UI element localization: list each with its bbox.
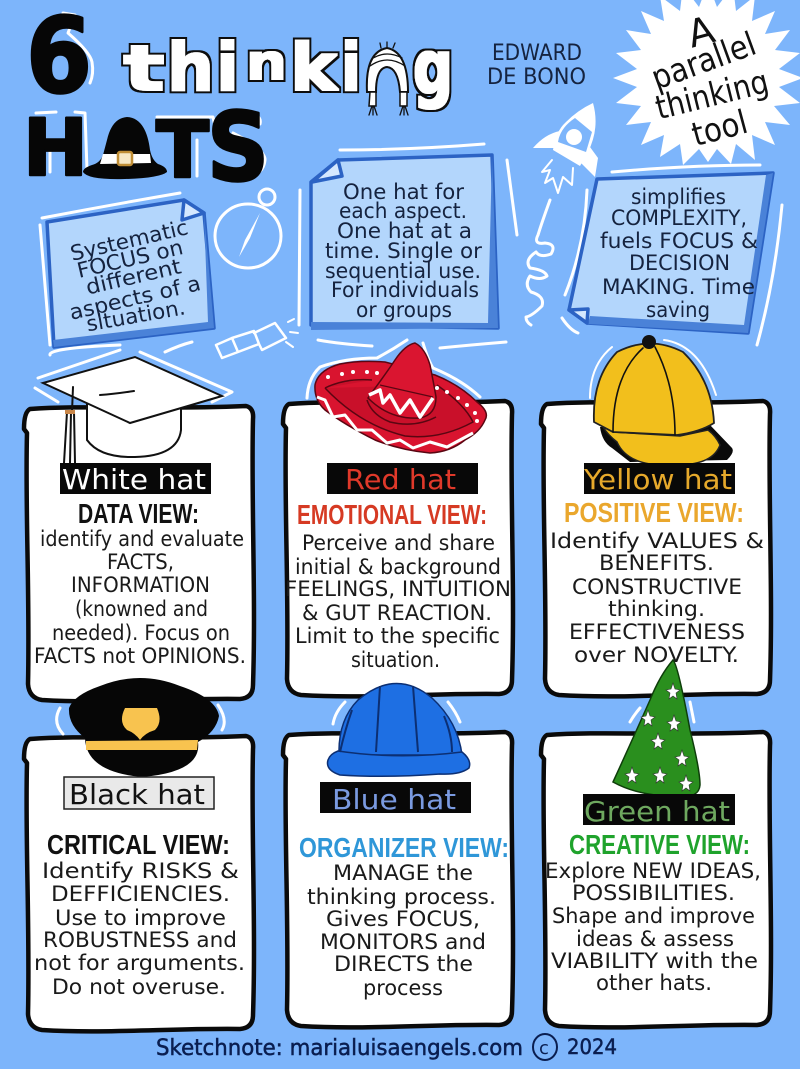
note: one hat for each aspect: or groups [356,298,452,322]
description text: EFFECTIVENESS [569,620,745,644]
footer credit: Sketchnote: marialuisaengels.com [156,1036,523,1061]
word: thinking: g [413,25,453,111]
note: simplifies complexity [569,173,773,333]
description text: Gives FOCUS, [326,907,480,931]
footer credit: c [539,1038,549,1059]
description text: identify and evaluate [40,527,244,551]
hat label: Yellow hat [583,463,732,496]
description text: CONSTRUCTIVE [572,575,742,599]
starburst callout: a parallel thinking tool: tool [687,102,752,154]
description text: initial & background [295,555,501,579]
note: systematic focus: different [84,254,183,299]
note: one hat for each aspect: sequential use. [325,259,481,283]
description text: VIABILITY with the [551,949,758,973]
note: one hat for each aspect [311,155,498,330]
author name: DE BONO [487,65,586,90]
description text: DEFFICIENCIES. [51,882,230,906]
description text [550,529,764,667]
starburst callout: a parallel thinking tool: A [683,7,719,57]
note: simplifies complexity: saving [646,298,710,322]
panel: white hat [24,350,254,701]
description text: Limit to the specific [295,624,500,648]
description text: BENEFITS. [599,551,714,575]
note: one hat for each aspect: For individuals [331,278,479,302]
word: thinking [123,25,453,115]
word: hats [23,93,269,203]
description text: process [363,976,443,1000]
word: thinking: i [341,29,361,106]
note: simplifies complexity: MAKING. Time [602,275,755,299]
starburst callout: a parallel thinking tool [613,0,800,165]
panel: blue hat [283,683,513,1027]
icon: green wizard hat [613,660,700,796]
description text: situation. [351,648,440,672]
description text: Explore NEW IDEAS, [545,859,761,883]
heading: critical view: CRITICAL VIEW: [47,829,230,860]
description text: Shape and improve [552,904,755,928]
description text: & GUT REACTION. [302,601,492,625]
description text: (knowned and [75,597,208,621]
panel: black hat [24,678,254,1031]
description text: Do not overuse. [52,975,226,999]
description text: ROBUSTNESS and [43,928,237,952]
footer credit: 2024 [567,1035,617,1059]
description text: FEELINGS, INTUITION [285,577,511,601]
note: systematic focus: situation. [84,295,187,336]
description text: over NOVELTY. [574,643,739,667]
icon: blue hard hat [328,683,470,776]
note: systematic focus: Systematic [68,215,190,266]
description text: Identify RISKS & [42,859,239,883]
heading: emotional view: EMOTIONAL VIEW: [297,499,487,530]
description text: ideas & assess [576,927,734,951]
note: systematic focus: aspects of a [67,271,203,325]
description text: FACTS not OPINIONS. [34,644,246,668]
description text: other hats. [596,971,712,995]
heading: data view: DATA VIEW: [78,498,199,529]
title: 6 thinking hats [23,0,453,203]
note: one hat for each aspect: time. Single or [325,239,482,263]
icon: graduation cap [43,357,222,463]
description text: MONITORS and [320,930,486,954]
description text [34,527,246,668]
heading: creative view: CREATIVE VIEW: [569,829,750,860]
word: thinking: n [246,35,287,91]
word: thinking: t [123,32,165,105]
word: thinking: h [167,29,214,106]
hat label: Green hat [584,795,730,828]
author name [487,41,586,90]
word: hats: T [156,106,209,196]
heading: positive view: POSITIVE VIEW: [564,497,744,528]
panel: yellow hat [541,335,771,696]
author name: EDWARD [492,41,582,66]
word: hats: H [23,104,88,194]
note: one hat for each aspect: One hat at a [337,219,472,243]
description text [545,859,761,995]
description text [285,531,511,672]
panel: green hat [541,660,771,1027]
description text: not for arguments. [34,951,245,975]
icon: compass doodle [215,189,281,268]
note: one hat for each aspect: each aspect. [339,199,467,223]
note: simplifies complexity: COMPLEXITY, [611,206,747,230]
description text: Perceive and share [302,531,495,555]
icon: red sombrero [315,343,486,453]
description text: thinking process. [307,885,496,909]
icon: pilgrim hat as letter A [83,117,167,179]
description text: MANAGE the [333,861,473,885]
heading: organizer view: ORGANIZER VIEW: [299,832,509,863]
note: simplifies complexity: simplifies [631,185,726,209]
starburst callout: a parallel thinking tool: thinking [651,62,772,127]
description text: Use to improve [55,906,226,930]
icon: knitted hat in place of letter [367,42,408,115]
hat label: Blue hat [332,783,456,816]
word: thinking: k [290,31,339,106]
hat label: Black hat [69,778,205,811]
starburst callout: a parallel thinking tool: parallel [646,24,761,97]
note: systematic focus [47,200,214,347]
icon: officer cap [69,678,219,777]
description text: thinking. [608,597,705,621]
description text: INFORMATION [71,573,210,597]
squiggle line [526,200,553,325]
note: systematic focus: FOCUS on [75,235,185,283]
panel: red hat [283,340,513,696]
word: hats: S [207,93,269,203]
description text [307,861,496,1000]
description text [34,859,245,999]
icon: yellow cap [594,335,733,465]
description text: DIRECTS the [334,952,473,976]
description text: POSSIBILITIES. [572,881,735,905]
description text: needed). Focus on [52,621,230,645]
note: simplifies complexity: DECISION [629,251,730,275]
description text: FACTS, [107,550,174,574]
decorative swooshes [40,144,782,355]
description text: Identify VALUES & [550,529,764,553]
icon: rocket doodle [533,103,598,193]
hat label: Red hat [345,463,456,496]
hat label: White hat [62,463,206,496]
icon: flashlight doodle [216,319,298,358]
note: one hat for each aspect: One hat for [343,180,464,204]
word: thinking: i [216,29,239,106]
note: simplifies complexity: fuels FOCUS & [600,229,758,253]
